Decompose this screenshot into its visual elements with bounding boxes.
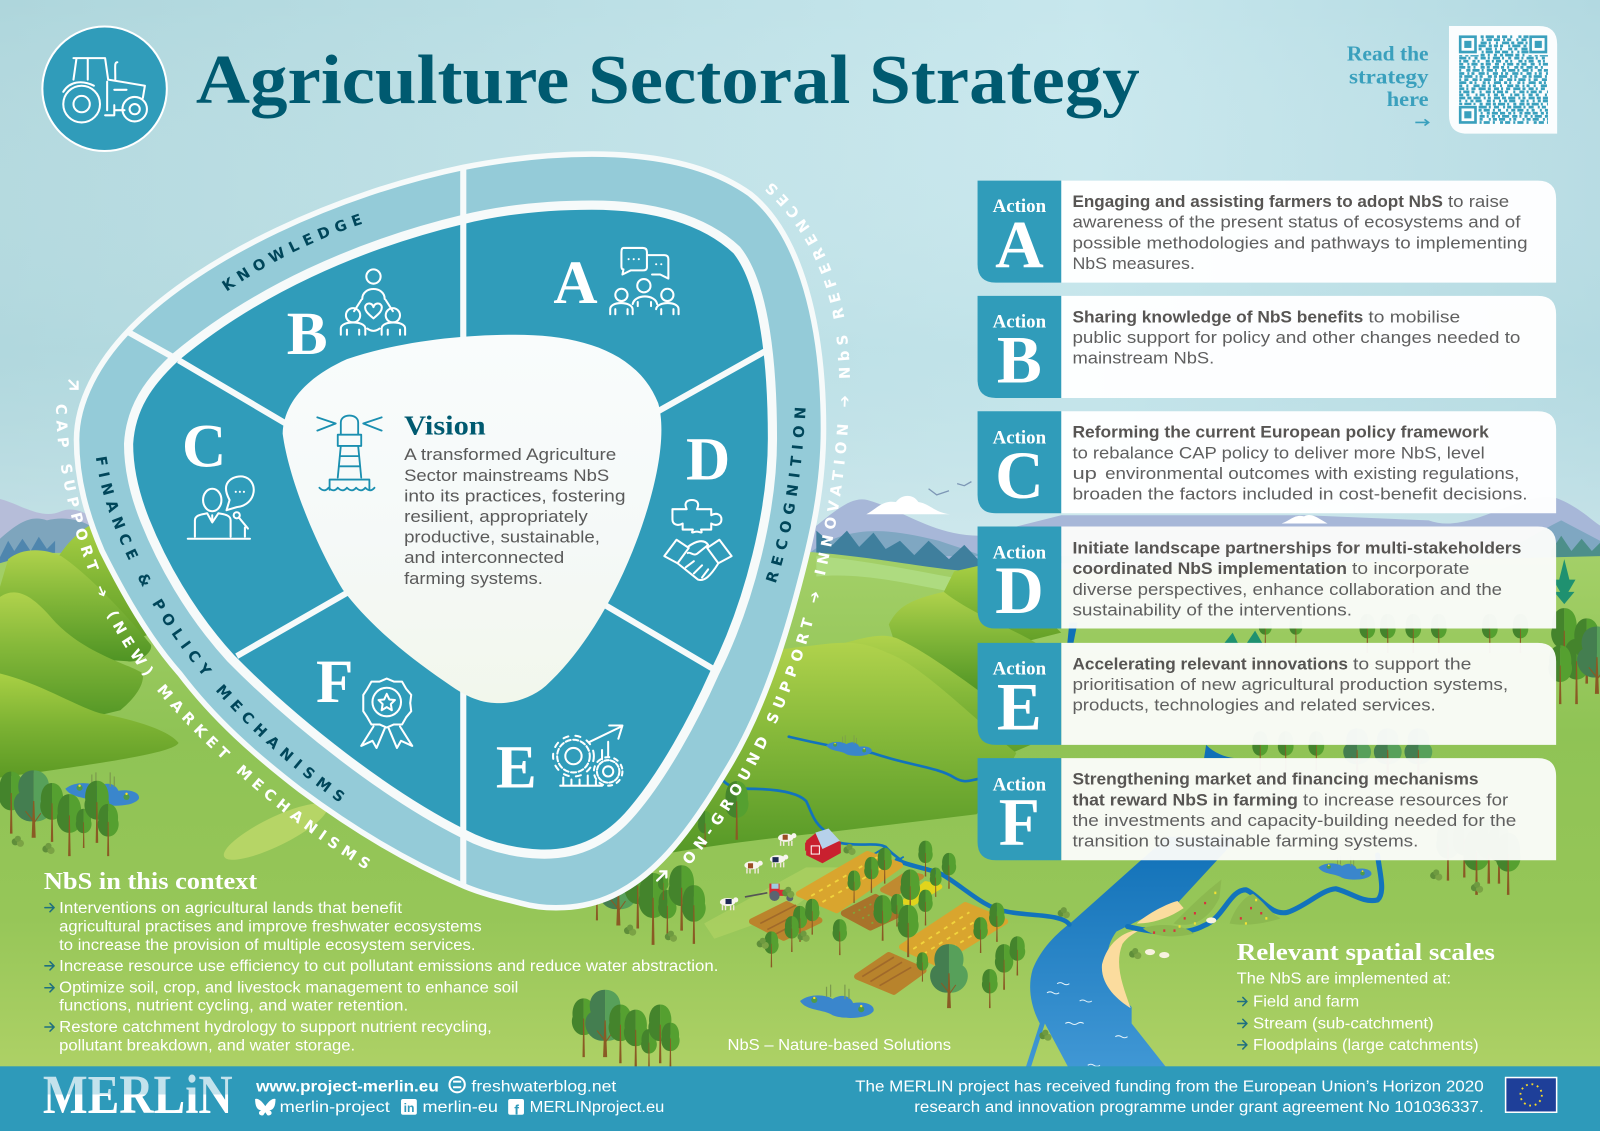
bullet text: Optimize soil, crop, and livestock management to enhance soil xyxy=(59,979,518,996)
action cards xyxy=(978,181,1556,860)
ponds xyxy=(65,735,1372,1018)
funding statement: The MERLIN project has received funding from the European Union’s Horizon 2020 xyxy=(855,1078,1484,1095)
card: action E: products, technologies and related services. xyxy=(1072,696,1436,715)
card: action F: to increase resources for xyxy=(1303,790,1509,809)
relevant spatial scales block: Stream (sub-catchment) xyxy=(1253,1016,1434,1033)
vision text: into its practices, fostering xyxy=(404,486,626,505)
EU flag xyxy=(1506,1078,1557,1112)
NbS in this context block xyxy=(44,869,718,1054)
bullet text: pollutant breakdown, and water storage. xyxy=(59,1037,355,1054)
card: action D xyxy=(978,527,1556,629)
vision text: farming systems. xyxy=(404,569,543,588)
card: action C: C xyxy=(995,438,1044,513)
card: action D: diverse perspectives, enhance collaboration and the xyxy=(1072,580,1502,599)
panel letters xyxy=(182,249,730,802)
header logo: tractor icon xyxy=(42,27,167,151)
ring label: knowledge: KNOWLEDGE xyxy=(222,214,362,291)
card: action F: the investments and capacity-building needed for the xyxy=(1072,811,1516,830)
card: action C: up xyxy=(1072,464,1097,483)
wildflower meadow dots xyxy=(1143,880,1281,936)
bullet text: agricultural practises and improve freshwater ecosystems xyxy=(59,919,482,936)
river xyxy=(1024,622,1239,1071)
card: action F: Action xyxy=(993,774,1047,795)
vision text: resilient, appropriately xyxy=(404,507,588,526)
card: action A: Action xyxy=(993,196,1047,217)
read the strategy callout: Read the xyxy=(1347,42,1429,66)
inner action panels xyxy=(129,205,772,854)
card: action A: possible methodologies and pathways to implementing xyxy=(1072,233,1528,252)
read the strategy callout xyxy=(1347,42,1429,126)
panel letters: D xyxy=(686,426,730,494)
heading: NbS in this context xyxy=(44,869,257,895)
card: action B: to mobilise xyxy=(1368,307,1460,326)
icon: lighthouse xyxy=(317,416,382,490)
card: action E: Accelerating relevant innovations xyxy=(1072,654,1348,673)
card: action B: B xyxy=(997,323,1042,398)
vision text: A transformed Agriculture xyxy=(404,445,616,464)
card: action B xyxy=(978,296,1556,398)
vision centre panel xyxy=(283,335,661,703)
icon: gears and growth arrow (E) xyxy=(553,725,622,786)
vision heading: Vision xyxy=(404,410,486,441)
icon: rosette award (F) xyxy=(361,679,412,748)
bullet text xyxy=(59,900,718,1054)
panel letters: F xyxy=(316,648,353,716)
icon: puzzle and handshake (D) xyxy=(664,500,732,580)
card: action A: A xyxy=(995,207,1044,282)
bullet text: to increase the provision of multiple ecosystem services. xyxy=(59,937,476,954)
left hills xyxy=(0,523,179,778)
vision text xyxy=(404,445,626,588)
icon: people talking (A) xyxy=(610,248,679,314)
light meadow patches xyxy=(218,556,980,939)
bullet arrows xyxy=(45,904,54,1031)
footer xyxy=(0,1064,1600,1131)
small white direction arrows xyxy=(69,381,666,881)
panel letters: B xyxy=(287,300,328,368)
farm fields xyxy=(752,854,1005,992)
card: action D: Action xyxy=(993,543,1047,564)
social links: merlin-project xyxy=(280,1099,390,1116)
QR code xyxy=(1449,26,1557,134)
funding statement: research and innovation programme under grant agreement No 101036337. xyxy=(914,1099,1484,1116)
icon: community heart (B) xyxy=(341,269,405,335)
card: action F xyxy=(978,758,1556,860)
MERLIN logo: MERLiN xyxy=(43,1064,233,1125)
card: action A: Engaging and assisting farmers to adopt NbS xyxy=(1072,192,1443,211)
panel letters: A xyxy=(553,249,598,317)
relevant spatial scales block: Field and farm xyxy=(1253,994,1359,1011)
social links: merlin-eu xyxy=(422,1099,498,1116)
bullet text: Restore catchment hydrology to support nutrient recycling, xyxy=(59,1019,492,1036)
panel dividers xyxy=(179,220,767,834)
bullet text: functions, nutrient cycling, and water retention. xyxy=(59,998,408,1015)
ring label: finance and policy mechanisms: FINANCE & POLICY MECHANISMS xyxy=(96,456,344,802)
card: action B: mainstream NbS. xyxy=(1072,349,1214,368)
card: action D: Initiate landscape partnerships for multi-stakeholders xyxy=(1072,539,1521,558)
card: action E: E xyxy=(997,670,1042,745)
farm barn xyxy=(805,829,841,863)
card: action E: prioritisation of new agricultural production systems, xyxy=(1072,675,1508,694)
streams xyxy=(721,737,1426,933)
outer label: cap support to market mechanisms: CAP SUPPORT ➔ (NEW) MARKET MECHANISMS xyxy=(56,404,370,868)
card: action E xyxy=(978,643,1556,745)
card: action B: public support for policy and other changes needed to xyxy=(1072,328,1520,347)
read the strategy callout: here xyxy=(1387,87,1429,111)
icon: speaker at podium (C) xyxy=(188,476,254,539)
card: action C: Reforming the current European policy framework xyxy=(1072,423,1489,442)
card: action C xyxy=(978,411,1556,513)
vision text: productive, sustainable, xyxy=(404,528,600,547)
website and blog xyxy=(255,1077,617,1095)
social links: in xyxy=(404,1101,414,1115)
ring dividers xyxy=(128,167,463,886)
card: action D: coordinated NbS implementation xyxy=(1072,559,1347,578)
card: action B: Action xyxy=(993,312,1047,333)
right hills behind ring xyxy=(653,563,1061,869)
tractor and cows xyxy=(720,833,1216,958)
card: action C: environmental outcomes with existing regulations, xyxy=(1105,464,1519,483)
water ripples xyxy=(1047,983,1128,1066)
card: action A xyxy=(978,181,1556,283)
card: action A: to raise xyxy=(1448,192,1509,211)
card: action A: NbS measures. xyxy=(1072,254,1195,273)
social links: MERLINproject.eu xyxy=(530,1099,664,1116)
grass ground xyxy=(0,551,1600,1071)
card: action F: that reward NbS in farming xyxy=(1072,790,1298,809)
card: action D: D xyxy=(995,553,1044,628)
NbS abbreviation note: NbS – Nature-based Solutions xyxy=(728,1037,951,1054)
relevant spatial scales block xyxy=(1237,940,1495,1054)
card: action E: to support the xyxy=(1353,654,1471,673)
funding statement xyxy=(855,1078,1484,1116)
bushes xyxy=(12,836,1483,1041)
relevant spatial scales block: Floodplains (large catchments) xyxy=(1253,1037,1479,1054)
mountains left xyxy=(0,499,112,571)
card: action F: transition to sustainable farming systems. xyxy=(1072,832,1418,851)
read the strategy callout: strategy xyxy=(1349,65,1429,89)
relevant spatial scales block: The NbS are implemented at: xyxy=(1237,971,1451,988)
card: action B: Sharing knowledge of NbS benefits xyxy=(1072,307,1363,326)
social links xyxy=(255,1099,664,1118)
mountains right xyxy=(796,497,1600,582)
card: action C: to rebalance CAP policy to deliver more NbS, level xyxy=(1072,443,1485,462)
card: action C: Action xyxy=(993,427,1047,448)
ring label: recognition: RECOGNITION xyxy=(766,408,806,583)
outer label: on-ground support to NbS references: ON-GROUND SUPPORT ➔ INNOVATION ➔ NbS REFERENCES xyxy=(684,184,850,864)
relevant spatial scales block: Relevant spatial scales xyxy=(1237,940,1495,966)
vision text: Sector mainstreams NbS xyxy=(404,466,609,485)
bullet text: Increase resource use efficiency to cut pollutant emissions and reduce water abstraction. xyxy=(59,958,718,975)
card: action F: F xyxy=(999,785,1040,860)
strategy wheel xyxy=(56,151,850,910)
panel letters: E xyxy=(496,734,537,802)
card: action D: to incorporate xyxy=(1352,559,1469,578)
title: Agriculture Sectoral Strategy xyxy=(196,41,1140,119)
vision text: and interconnected xyxy=(404,548,564,567)
river bank sand xyxy=(1102,901,1184,1008)
bullet text: Interventions on agricultural lands that benefit xyxy=(59,900,403,917)
card: action A: awareness of the present status of ecosystems and of xyxy=(1072,213,1521,232)
card: action F: Strengthening market and financing mechanisms xyxy=(1072,770,1479,789)
social links: f xyxy=(514,1102,519,1118)
website and blog: freshwaterblog.net xyxy=(471,1078,617,1095)
card: action E: Action xyxy=(993,658,1047,679)
outer ring xyxy=(77,154,823,908)
panel letters: C xyxy=(182,412,226,480)
card: action C: broaden the factors included in cost-benefit decisions. xyxy=(1072,485,1528,504)
clouds and birds xyxy=(866,482,1328,523)
card: action D: sustainability of the interventions. xyxy=(1072,600,1352,619)
trees xyxy=(0,559,1600,1068)
website and blog: www.project-merlin.eu xyxy=(255,1078,439,1095)
